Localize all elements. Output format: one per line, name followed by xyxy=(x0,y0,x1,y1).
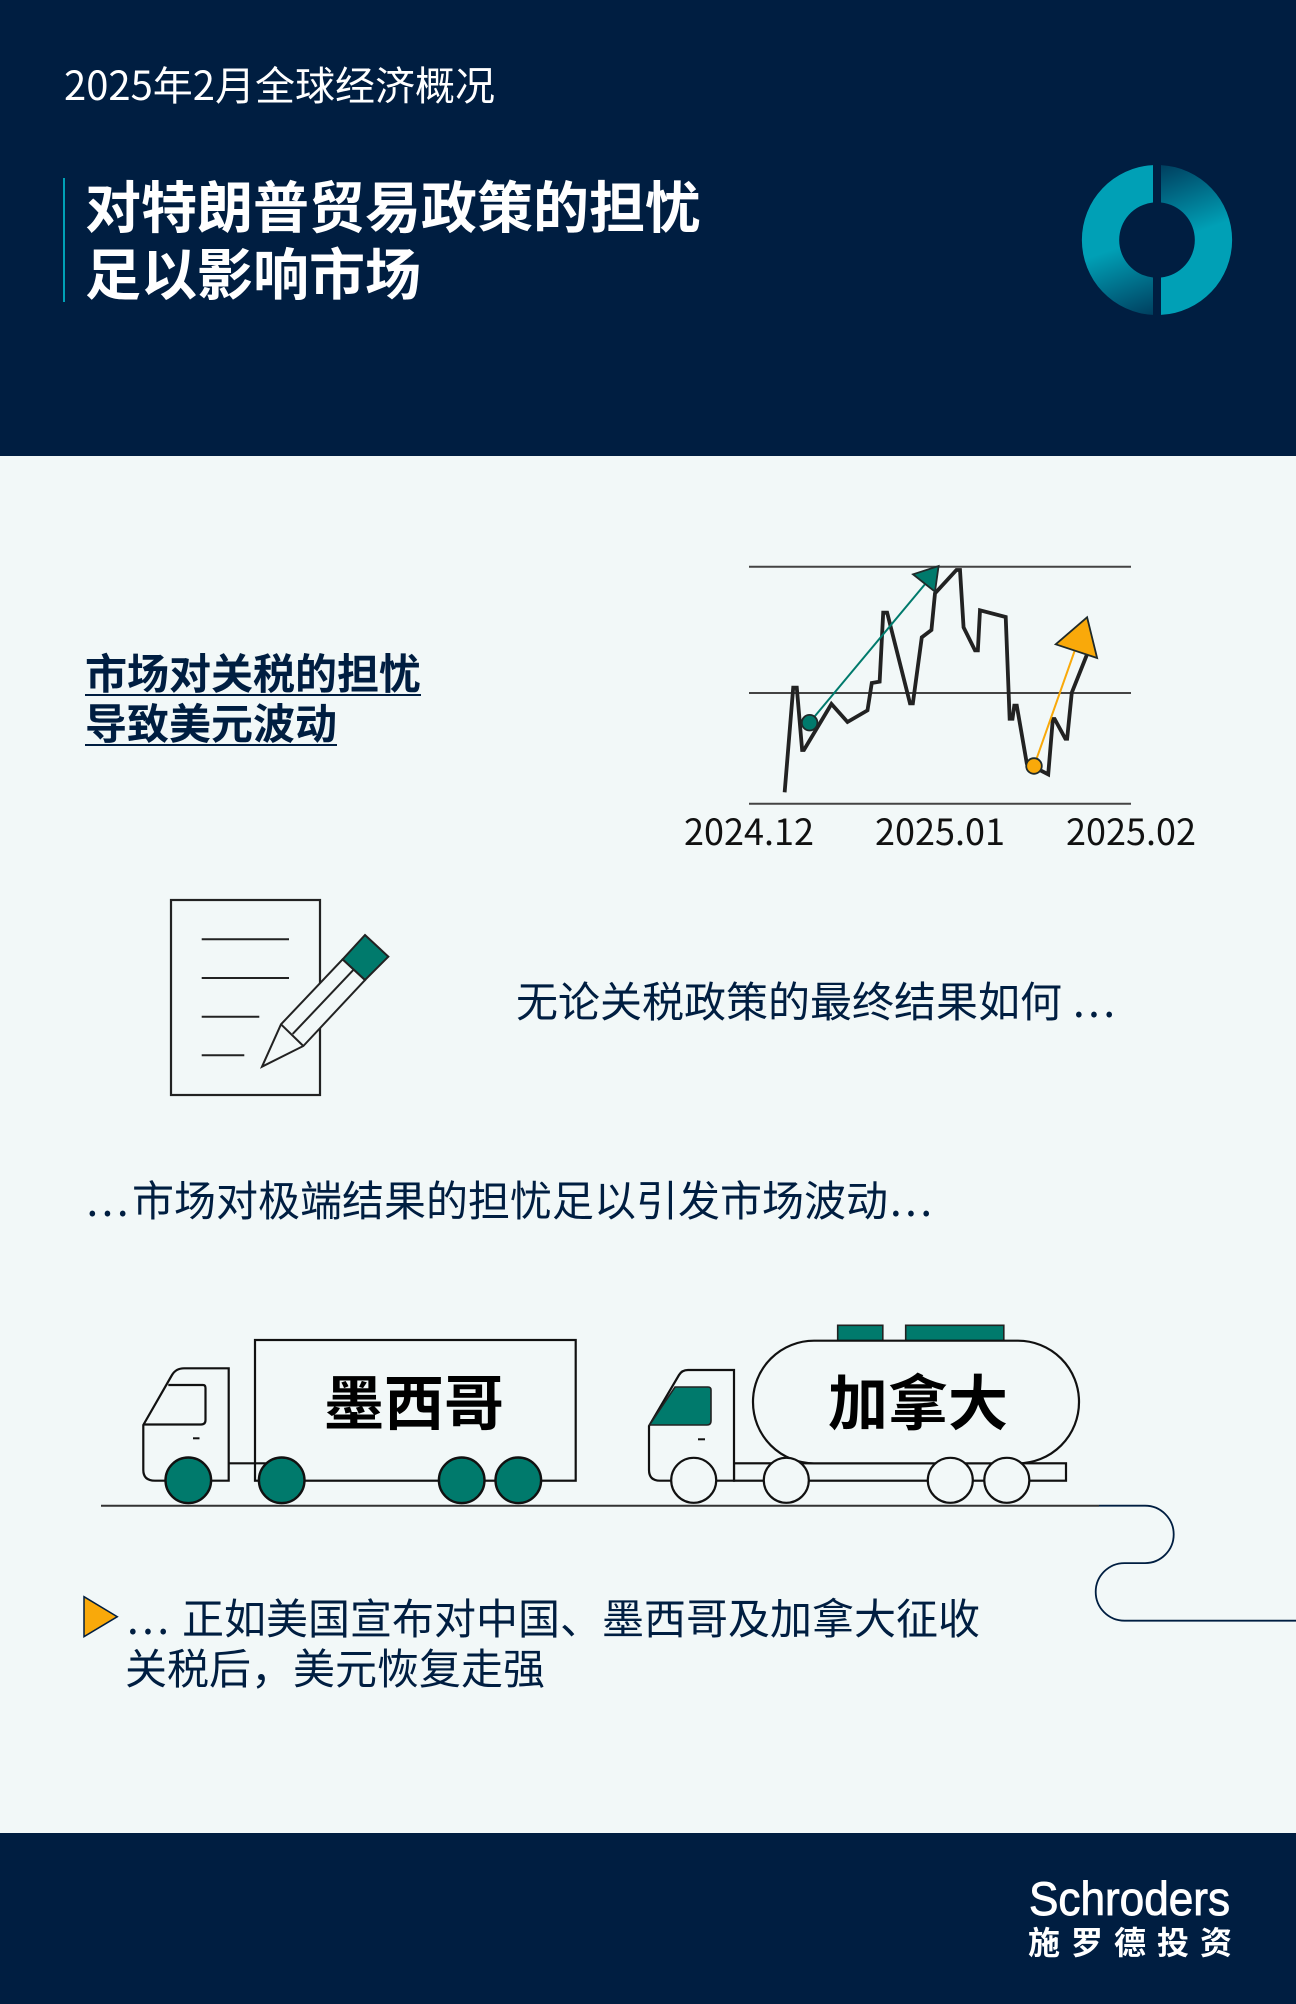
icon: document and pencil xyxy=(171,900,388,1095)
icon: orange triangle bullet xyxy=(84,1597,117,1637)
road line with curve xyxy=(101,1506,1296,1621)
cab xyxy=(143,1368,270,1481)
cargo box xyxy=(255,1340,576,1481)
orange rising arrow xyxy=(1026,617,1097,774)
wheels xyxy=(671,1458,1029,1503)
Schroders logo xyxy=(1028,1872,1232,1964)
dollar index line xyxy=(785,570,1087,792)
section heading xyxy=(85,641,421,752)
truck: Mexico xyxy=(143,1340,576,1503)
text: dollar strengthened xyxy=(125,1586,980,1697)
x axis labels: 2025.01 xyxy=(875,804,1005,856)
truck label: 墨西哥 xyxy=(324,1356,504,1443)
tank hatches xyxy=(838,1325,1004,1341)
teal rising arrow xyxy=(802,566,939,730)
text: extreme outcome fears: 市场对极端结果的担忧足以引发市场波动 xyxy=(132,1168,888,1229)
wheels xyxy=(166,1458,541,1503)
Schroders logo: 施罗德投资 xyxy=(1028,1918,1232,1964)
truck label: 加拿大 xyxy=(828,1356,1008,1443)
truck: Canada tanker xyxy=(649,1325,1079,1503)
text: extreme outcome fears: ... xyxy=(86,1168,132,1229)
Schroders logo: Schroders xyxy=(1029,1872,1230,1925)
text: dollar strengthened: 正如美国宣布对中国、墨西哥及加拿大征收 xyxy=(182,1586,980,1647)
title: 足以影响市场 xyxy=(85,231,421,312)
footer band xyxy=(0,1833,1296,2004)
line chart: dollar volatility xyxy=(684,566,1196,856)
text: dollar strengthened: 关税后，美元恢复走强 xyxy=(125,1636,545,1697)
title xyxy=(85,164,701,312)
tank xyxy=(753,1341,1079,1463)
section heading: 导致美元波动 xyxy=(85,691,337,752)
pencil xyxy=(262,935,388,1067)
subtitle: 2025年2月全球经济概况 xyxy=(64,54,495,112)
header band xyxy=(0,0,1296,456)
x axis labels xyxy=(684,804,1196,856)
text: regardless of outcome: ... xyxy=(1073,969,1119,1030)
text: extreme outcome fears: ... xyxy=(890,1168,936,1229)
text: regardless of outcome: 无论关税政策的最终结果如何 xyxy=(516,969,1062,1030)
title accent bar xyxy=(63,178,65,302)
x axis labels: 2025.02 xyxy=(1066,804,1196,856)
section heading: 市场对关税的担忧 xyxy=(85,641,421,702)
cab xyxy=(649,1370,734,1481)
x axis labels: 2024.12 xyxy=(684,804,814,856)
icon: split ring logo xyxy=(1082,165,1232,315)
title: 对特朗普贸易政策的担忧 xyxy=(85,164,701,245)
chassis xyxy=(734,1463,1066,1481)
text: dollar strengthened: ... xyxy=(127,1586,173,1647)
